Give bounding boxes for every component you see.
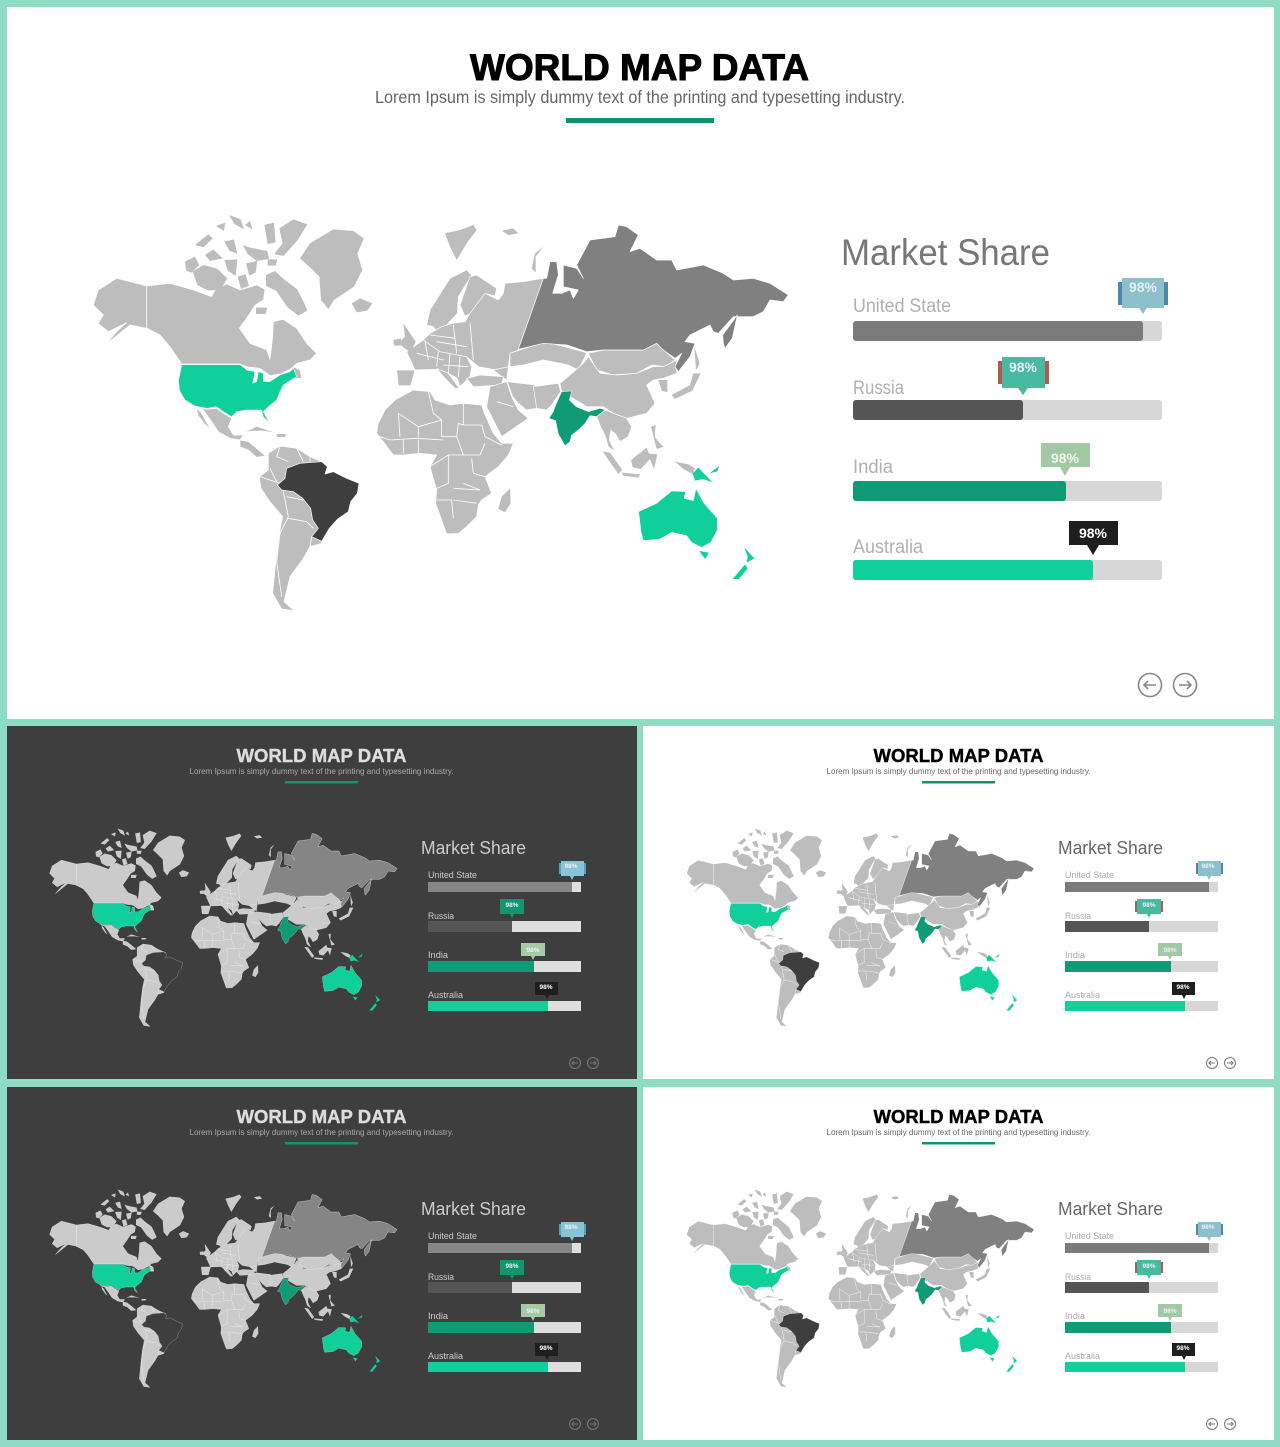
- heading: market share: Market Share: [1058, 1198, 1163, 1219]
- subtitle: Lorem Ipsum is simply dummy text of the printing and typesetting industry.: [826, 766, 1090, 776]
- world map: [50, 828, 397, 1026]
- panel: dark slide bottom: [7, 1087, 637, 1440]
- map: Canada and Alaska: [93, 278, 317, 376]
- bar: India: [853, 443, 1162, 501]
- map: Svalbard: [445, 225, 477, 260]
- map: India: [549, 391, 606, 446]
- bars: 98%: [564, 1224, 578, 1231]
- bar: India: 98%: [1051, 450, 1080, 466]
- bars: Russia: [1065, 911, 1092, 922]
- subtitle: Lorem Ipsum is simply dummy text of the printing and typesetting industry.: [375, 87, 905, 107]
- map: Kazakhstan: [510, 342, 587, 370]
- map: Brazil: [277, 462, 359, 541]
- map: Greenland: [300, 229, 364, 309]
- icon: previous and next arrows: [1138, 674, 1196, 696]
- map: UK and Ireland: [399, 323, 416, 352]
- bars: Australia: [428, 1351, 464, 1362]
- bars: Australia: [1065, 1351, 1101, 1362]
- icon: arrows: [570, 1418, 598, 1430]
- bars: 98%: [1176, 1345, 1190, 1352]
- bars: India: [1065, 950, 1086, 961]
- bar: United State: 98%: [1129, 279, 1158, 295]
- bar: India: India: [853, 457, 893, 478]
- map: Southeast Asia: [597, 410, 632, 452]
- map: New Zealand: [744, 548, 754, 563]
- icon: arrows: [570, 1058, 598, 1068]
- bars: 98%: [526, 947, 540, 954]
- title: WORLD MAP DATA: [236, 745, 406, 766]
- bars: [428, 1222, 586, 1372]
- panel: light slide top: [643, 726, 1274, 1079]
- map: Korea and Japan: [658, 380, 667, 392]
- bars: [428, 861, 586, 1011]
- bar: Russia: Russia: [853, 378, 904, 399]
- bars: 98%: [526, 1308, 540, 1315]
- bars: 98%: [1201, 1224, 1215, 1231]
- bars: 98%: [564, 863, 578, 870]
- subtitle: Lorem Ipsum is simply dummy text of the printing and typesetting industry.: [190, 766, 454, 776]
- bars: [1065, 861, 1223, 1011]
- subtitle: Lorem Ipsum is simply dummy text of the printing and typesetting industry.: [826, 1127, 1090, 1137]
- bar: Australia: Australia: [853, 537, 923, 558]
- world map: [93, 215, 788, 611]
- heading: market share: Market Share: [421, 1198, 526, 1219]
- map: Mexico and Central America: [195, 407, 243, 440]
- map: Russia: [518, 225, 788, 372]
- bars: United State: [428, 870, 477, 881]
- bars: India: [428, 1311, 449, 1322]
- bars: 98%: [1142, 902, 1156, 909]
- map: Americas and Greenland: [93, 215, 372, 611]
- title underline: [566, 118, 714, 123]
- bars: 98%: [539, 1345, 553, 1352]
- world map: [687, 1190, 1034, 1387]
- panel: market share: [841, 232, 1168, 580]
- bar: United State: [853, 278, 1168, 341]
- map: Turkey and Middle East: [467, 375, 503, 387]
- map: Caucasus: [493, 367, 508, 380]
- map: Scandinavia: [427, 270, 472, 332]
- map: Australia: [639, 489, 717, 547]
- bar: Australia: 98%: [1079, 525, 1108, 541]
- panel: dark slide top: [7, 726, 637, 1079]
- bars: Australia: [1065, 990, 1101, 1001]
- heading: market share: Market Share: [841, 232, 1050, 273]
- world map: [687, 828, 1034, 1026]
- title: WORLD MAP DATA: [874, 745, 1044, 766]
- title: WORLD MAP DATA: [236, 1106, 406, 1127]
- map: Spain: [397, 370, 415, 386]
- map: Maritime islands: [293, 367, 302, 378]
- icon: arrows: [1206, 1058, 1236, 1068]
- bars: Russia: [428, 1272, 455, 1283]
- bars: 98%: [1176, 984, 1190, 991]
- bar: Russia: 98%: [1009, 359, 1038, 375]
- map: Western Russia and Eastern Europe: [423, 278, 543, 370]
- map: Iceland: [352, 298, 372, 312]
- bars: 98%: [505, 902, 519, 909]
- bars: Australia: [428, 990, 464, 1001]
- bars: United State: [428, 1231, 477, 1242]
- map: Madagascar: [498, 488, 511, 512]
- panel: main slide: [7, 7, 1274, 719]
- map: United States: [179, 365, 297, 422]
- bars: India: [1065, 1311, 1086, 1322]
- map: Africa: [377, 390, 513, 534]
- map: Caribbean: [247, 427, 274, 432]
- bars: India: [428, 950, 449, 961]
- subtitle: Lorem Ipsum is simply dummy text of the printing and typesetting industry.: [190, 1127, 454, 1137]
- map: Afghanistan and Pakistan: [533, 383, 561, 410]
- bar: Russia: [853, 357, 1162, 420]
- title: WORLD MAP DATA: [874, 1106, 1044, 1127]
- map: Novaya Zemlya: [532, 247, 543, 272]
- heading: market share: Market Share: [421, 837, 526, 858]
- icon: arrows: [1206, 1418, 1236, 1430]
- bars: 98%: [1201, 863, 1215, 870]
- map: Western Europe: [407, 340, 472, 387]
- title: WORLD MAP DATA: [470, 47, 810, 88]
- heading: market share: Market Share: [1058, 837, 1163, 858]
- bar: Australia: [853, 521, 1162, 580]
- panel: light slide bottom: [643, 1087, 1274, 1440]
- map: China: [560, 357, 677, 418]
- map: Papua New Guinea: [693, 468, 712, 482]
- bars: Russia: [1065, 1272, 1092, 1283]
- bars: 98%: [505, 1263, 519, 1270]
- world map: [50, 1190, 397, 1387]
- map: Mongolia: [588, 343, 675, 375]
- bars: 98%: [539, 984, 553, 991]
- map: South America: [259, 446, 325, 611]
- map: Arctic islands: [185, 215, 307, 316]
- bars: 98%: [1163, 1308, 1177, 1315]
- bars: 98%: [1142, 1263, 1156, 1270]
- bars: United State: [1065, 870, 1114, 881]
- bars: Russia: [428, 911, 455, 922]
- bar: United State: United State: [853, 296, 951, 317]
- map: Eurasia, Africa and Oceania: [377, 225, 788, 579]
- bars: 98%: [1163, 947, 1177, 954]
- bars: [1065, 1222, 1223, 1372]
- bars: United State: [1065, 1231, 1114, 1242]
